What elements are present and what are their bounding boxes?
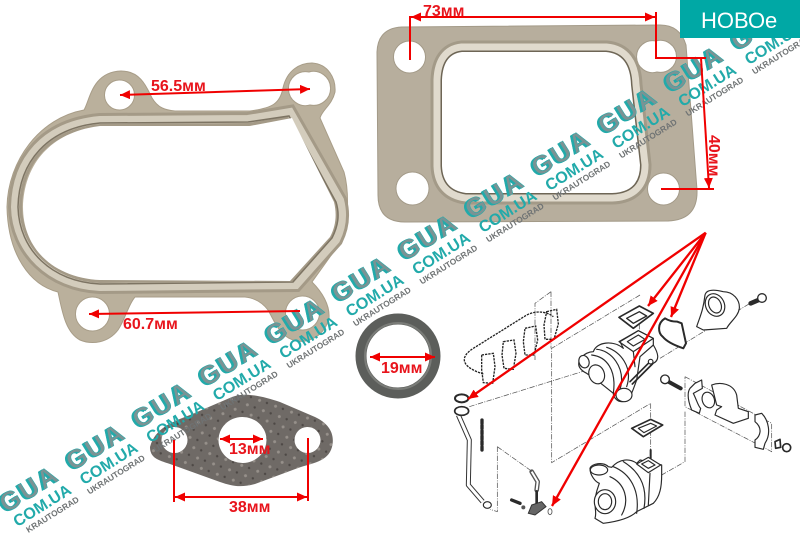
lower flange gasket in diagram xyxy=(632,419,663,437)
watermark: UKRAUTOGRAD: UKRAUTOGRAD xyxy=(551,159,612,202)
watermark: COM.UA: COM.UA xyxy=(476,188,541,237)
watermark: GUA letters: GUA xyxy=(459,164,530,224)
watermark: COM.UA: COM.UA xyxy=(144,398,208,447)
dimension: 56.5 mm xyxy=(120,78,310,95)
lower bolt xyxy=(661,375,681,388)
dimension: 19 mm: 19мм xyxy=(381,360,422,377)
dimension: 40 mm: 40мм xyxy=(705,135,722,176)
watermark: GUA letters: GUA xyxy=(393,206,464,266)
oil feed pipe xyxy=(455,394,491,508)
dimension: 73 mm xyxy=(410,3,706,60)
oval gasket in diagram xyxy=(659,318,686,348)
banjo bolt parts xyxy=(482,420,552,515)
top bolt xyxy=(751,294,766,303)
watermark: COM.UA: COM.UA xyxy=(343,272,408,321)
watermark: COM.UA: COM.UA xyxy=(277,314,341,363)
photo: rubber o-ring xyxy=(361,319,435,393)
watermark: GUA letters: GUA xyxy=(326,248,397,308)
watermark: UKRAUTOGRAD: UKRAUTOGRAD xyxy=(218,369,280,412)
sealing bead of rectangular gasket xyxy=(442,52,640,193)
watermark: GUA letters: GUA xyxy=(659,38,730,98)
watermark: UKRAUTOGRAD: UKRAUTOGRAD xyxy=(285,327,346,370)
watermark: UKRAUTOGRAD: UKRAUTOGRAD xyxy=(684,75,745,118)
dimension: 38 mm xyxy=(174,438,308,516)
watermark: COM.UA: COM.UA xyxy=(609,104,674,153)
watermark: GUA letters: GUA xyxy=(193,332,264,392)
watermark: COM.UA: COM.UA xyxy=(210,356,275,405)
dimension: 60.7 mm xyxy=(89,311,300,333)
watermark: COM.UA: COM.UA xyxy=(77,440,142,489)
watermark: GUA letters: GUA xyxy=(592,80,663,140)
watermark: UKRAUTOGRAD: UKRAUTOGRAD xyxy=(152,411,213,454)
watermark: GUA letters: GUA xyxy=(60,416,131,476)
watermark: UKRAUTOGRAD: UKRAUTOGRAD xyxy=(85,453,147,496)
watermark: COM.UA: COM.UA xyxy=(11,482,75,531)
turbo flange gasket in diagram xyxy=(619,306,653,328)
watermark: GUA letters: GUA xyxy=(526,122,597,182)
dimension: 38 mm: 38мм xyxy=(229,499,270,516)
lower turbocharger xyxy=(590,450,662,523)
top outlet elbow xyxy=(697,290,739,330)
upper turbocharger xyxy=(577,331,658,402)
exhaust manifold gaskets (dashed) xyxy=(464,309,558,383)
dimension: 60.7 mm: 60.7мм xyxy=(123,316,178,333)
photo: rectangular turbo flange gasket xyxy=(377,25,697,222)
photo: oval turbo gasket xyxy=(7,63,348,343)
watermark: UKRAUTOGRAD: UKRAUTOGRAD xyxy=(351,285,413,328)
dimension: 73 mm: 73мм xyxy=(423,3,464,20)
v-band clamps and elbow xyxy=(688,380,791,452)
watermark: UKRAUTOGRAD: UKRAUTOGRAD xyxy=(418,243,479,286)
watermark: UKRAUTOGRAD: UKRAUTOGRAD xyxy=(617,117,679,160)
dimension: 19 mm xyxy=(370,357,435,377)
sealing bead of oval gasket xyxy=(15,112,342,287)
badge: new xyxy=(680,0,800,38)
exploded parts diagram xyxy=(455,290,791,523)
watermark: GUA letters: GUA xyxy=(127,374,198,434)
photo: oil flange gasket xyxy=(150,395,333,486)
red arrows pointing to diagram parts xyxy=(468,233,706,506)
watermark: COM.UA: COM.UA xyxy=(410,230,474,279)
assembly guide lines xyxy=(469,292,772,512)
watermark: UKRAUTOGRAD: UKRAUTOGRAD xyxy=(484,201,546,244)
watermark: COM.UA: COM.UA xyxy=(543,146,607,195)
watermark: GUA letters: GUA xyxy=(260,290,331,350)
badge: new: НОВОе xyxy=(701,8,777,33)
dimension: 40 mm xyxy=(661,58,722,189)
watermark: COM.UA: COM.UA xyxy=(676,62,740,111)
dimension: 56.5 mm: 56.5мм xyxy=(151,78,206,95)
dimension: 13 mm: 13мм xyxy=(229,441,270,458)
